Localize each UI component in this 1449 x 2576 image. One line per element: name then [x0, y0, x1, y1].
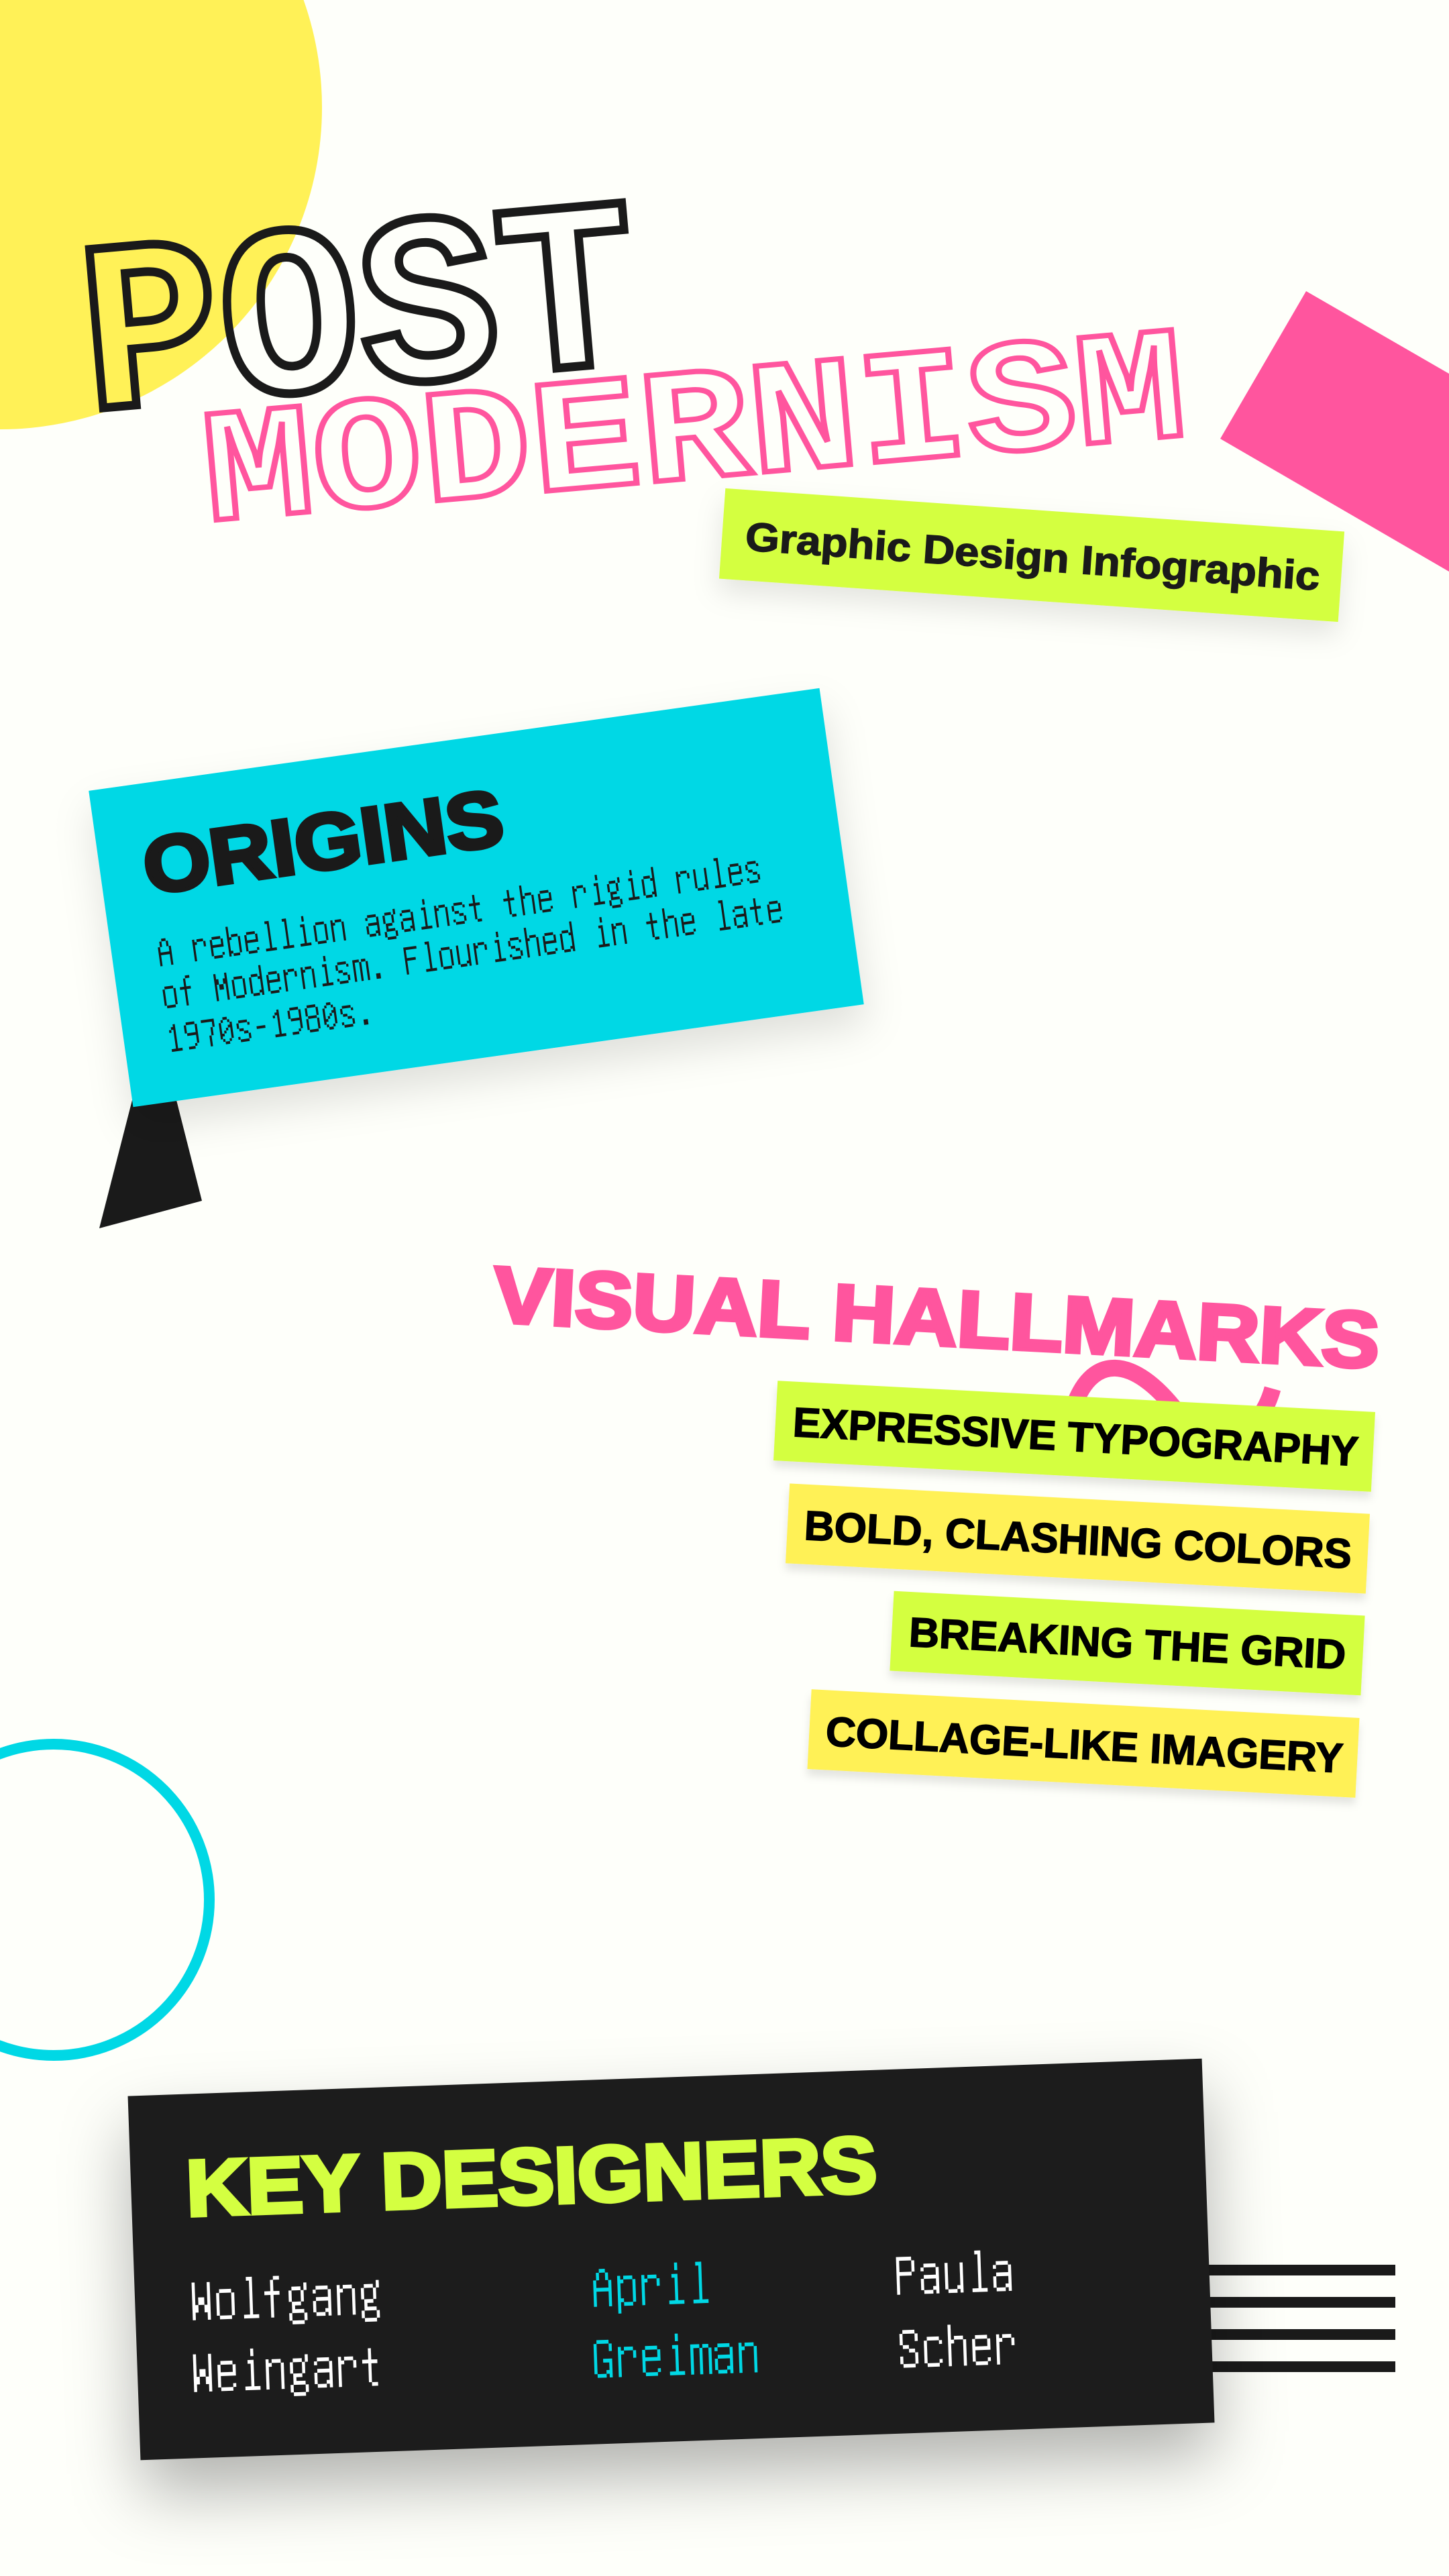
yellow circle: [0, 0, 322, 429]
subtitle tag: Graphic Design Infographic: [744, 514, 1322, 599]
origins body text: of Modernism. Flourished in the late: [158, 884, 786, 1015]
origins heading: ORIGINS: [138, 773, 508, 912]
designer: Paula Scher: Paula: [892, 2239, 1015, 2303]
squiggle behind hallmarks: [1072, 1368, 1273, 1438]
black stripes: [1154, 2265, 1395, 2372]
visual hallmarks heading: VISUAL HALLMARKS: [492, 1250, 1382, 1385]
designer: Wolfgang Weingart: Weingart: [189, 2334, 384, 2400]
origins body text: [153, 845, 786, 1059]
panel: key designers: [128, 2059, 1214, 2460]
hallmark tag 4: [807, 1689, 1360, 1798]
hallmark tag 1: [773, 1381, 1375, 1492]
hallmark tag 2: [786, 1483, 1370, 1594]
black wedge behind origins: [99, 1100, 202, 1228]
designer: Wolfgang Weingart: [188, 2262, 384, 2400]
title word: MODERNISM: MODERNISM: [197, 302, 1193, 570]
hallmark tag 3: [890, 1591, 1365, 1695]
origins body text: 1970s-1980s.: [162, 986, 376, 1059]
origins body text: A rebellion against the rigid rules: [153, 845, 763, 973]
key designers heading: KEY DESIGNERS: [184, 2121, 878, 2233]
hallmark tag 2: BOLD, CLASHING COLORS: [803, 1503, 1353, 1578]
pink rotated rectangle: [1220, 291, 1449, 572]
designer: Wolfgang Weingart: Wolfgang: [188, 2262, 383, 2328]
subtitle tag: [719, 488, 1344, 622]
designer: Paula Scher: [892, 2239, 1018, 2376]
designer: Paula Scher: Scher: [896, 2312, 1018, 2376]
hallmark tag 4: COLLAGE-LIKE IMAGERY: [824, 1709, 1344, 1782]
designer: April Greiman: [589, 2251, 761, 2386]
hallmark tag 3: BREAKING THE GRID: [908, 1609, 1347, 1678]
hallmark tag 1: EXPRESSIVE TYPOGRAPHY: [792, 1399, 1360, 1475]
cyan ring: [0, 1744, 209, 2055]
designer: April Greiman: April: [589, 2251, 712, 2315]
title: [70, 161, 1193, 570]
title word: POST: POST: [70, 161, 649, 482]
designer: April Greiman: Greiman: [590, 2320, 761, 2386]
panel: origins: [89, 688, 864, 1107]
